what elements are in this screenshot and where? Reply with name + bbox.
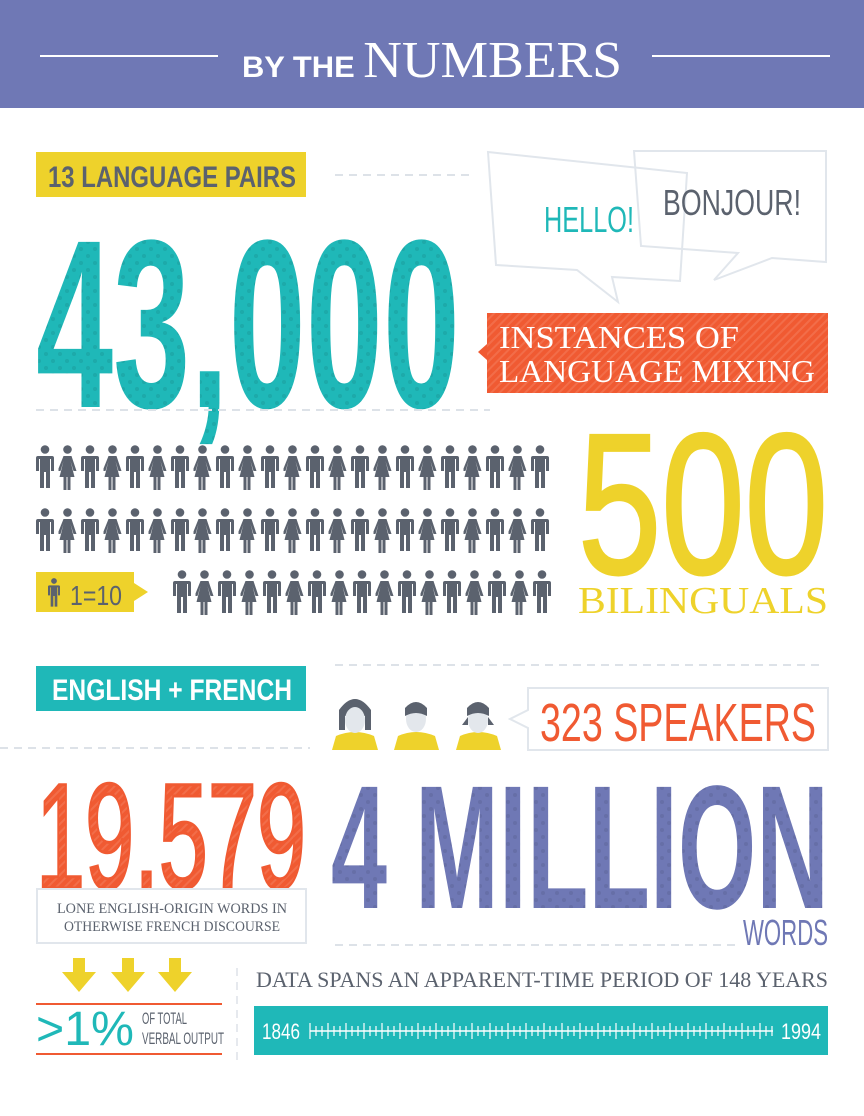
stat: >1% of total verbal output bbox=[36, 1003, 224, 1056]
big number 43,000: 43,000 bbox=[36, 190, 460, 458]
text: bonjour: BONJOUR! bbox=[663, 182, 801, 223]
timeline bar: 1994 bbox=[781, 1019, 821, 1044]
legend: 1=10 bbox=[36, 572, 148, 612]
header band bbox=[0, 0, 864, 108]
callout: instances of language mixing: LANGUAGE MIXING bbox=[499, 353, 815, 389]
label: 13 language pairs bbox=[36, 152, 306, 197]
big number 19,579: 19,579 bbox=[36, 752, 306, 920]
label: 13 language pairs: 13 LANGUAGE PAIRS bbox=[48, 161, 296, 194]
big number 500 bilinguals: BILINGUALS bbox=[578, 580, 828, 622]
speech bubbles bbox=[488, 151, 826, 302]
text box: lone english-origin words: LONE ENGLISH-ORIGIN WORDS IN bbox=[57, 901, 287, 917]
callout: instances of language mixing bbox=[478, 313, 828, 393]
stat: >1% of total verbal output: OF TOTAL bbox=[142, 1009, 187, 1028]
timeline bar: 1846 bbox=[262, 1019, 300, 1044]
callout: instances of language mixing: INSTANCES OF bbox=[499, 319, 739, 355]
label: english + french bbox=[36, 666, 306, 711]
label: english + french: ENGLISH + FRENCH bbox=[52, 674, 292, 707]
icons: speakers faces bbox=[332, 699, 501, 750]
text box: lone english-origin words bbox=[37, 889, 306, 943]
heading: data spans: DATA SPANS AN APPARENT-TIME PERIOD OF 148 YEARS bbox=[256, 967, 828, 992]
pictogram: people bbox=[36, 445, 551, 615]
big number 43,000 bbox=[36, 190, 460, 458]
legend: 1=10: 1=10 bbox=[70, 580, 122, 611]
timeline bar bbox=[254, 1006, 828, 1055]
title: BY THE NUMBERS bbox=[242, 32, 622, 89]
big number 43,000: 43,000 bbox=[36, 190, 460, 458]
text: hello: HELLO! bbox=[544, 199, 634, 240]
stat: >1% of total verbal output: VERBAL OUTPUT bbox=[142, 1029, 224, 1048]
stat: >1% of total verbal output: >1% bbox=[36, 1003, 134, 1056]
text box: lone english-origin words: OTHERWISE FRENCH DISCOURSE bbox=[64, 919, 280, 935]
arrows: down bbox=[62, 958, 192, 992]
